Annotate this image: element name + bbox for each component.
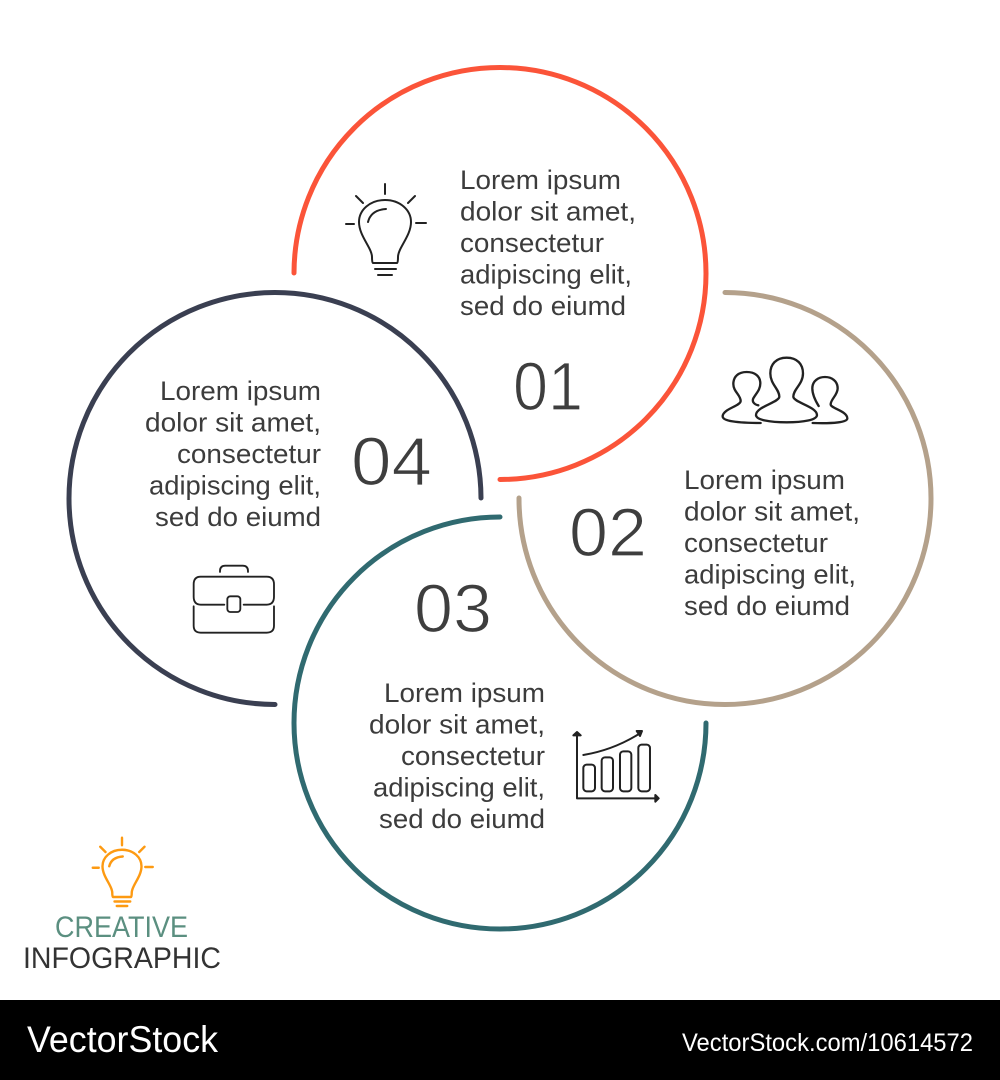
text block 01: consectetur: [460, 228, 604, 258]
logo text: creative: CREATIVE: [55, 911, 188, 944]
text block 04: adipiscing elit,: [149, 470, 321, 500]
logo text: infographic: INFOGRAPHIC: [23, 942, 221, 975]
text block 03: sed do eiumd: [379, 804, 545, 834]
text block 02: adipiscing elit,: [684, 560, 856, 590]
number 01: 01: [513, 348, 583, 425]
arc: circle 02 tan: [519, 292, 931, 704]
number 03: 03: [414, 570, 492, 647]
text block 03: adipiscing elit,: [373, 772, 545, 802]
text block 03: Lorem ipsum: [384, 678, 545, 708]
arc: circle 04 navy: [69, 292, 481, 704]
text block 03: [369, 678, 545, 834]
logo icon: orange bulb: [93, 838, 153, 906]
number 02: 02: [569, 494, 647, 571]
number 04: 04: [351, 423, 432, 500]
text block 04: sed do eiumd: [155, 502, 321, 532]
icon: briefcase: [194, 566, 274, 633]
text block 01: sed do eiumd: [460, 291, 626, 321]
text block 02: consectetur: [684, 528, 828, 558]
text block 03: dolor sit amet,: [369, 710, 545, 740]
icon: bar chart with arrow: [573, 731, 659, 802]
logo: creative infographic: [23, 838, 221, 975]
text block 04: dolor sit amet,: [145, 408, 321, 438]
text block 03: consectetur: [401, 741, 545, 771]
text block 04: [145, 376, 321, 532]
text block 01: Lorem ipsum: [460, 165, 621, 195]
footer bar: [0, 1000, 1000, 1080]
arc: circle 01 red: [294, 67, 706, 479]
icon: people group: [723, 358, 847, 423]
text block 01: dolor sit amet,: [460, 196, 636, 226]
icon: light bulb: [346, 184, 426, 275]
text block 04: consectetur: [177, 439, 321, 469]
arc: circle 03 teal: [294, 517, 706, 929]
text block 02: [684, 465, 860, 621]
text block 02: sed do eiumd: [684, 591, 850, 621]
footer brand: VectorStock: [27, 1019, 218, 1060]
text block 02: dolor sit amet,: [684, 496, 860, 526]
text block 01: [460, 165, 636, 321]
footer url: VectorStock.com/10614572: [682, 1029, 973, 1057]
text block 01: adipiscing elit,: [460, 260, 632, 290]
text block 04: Lorem ipsum: [160, 376, 321, 406]
text block 02: Lorem ipsum: [684, 465, 845, 495]
